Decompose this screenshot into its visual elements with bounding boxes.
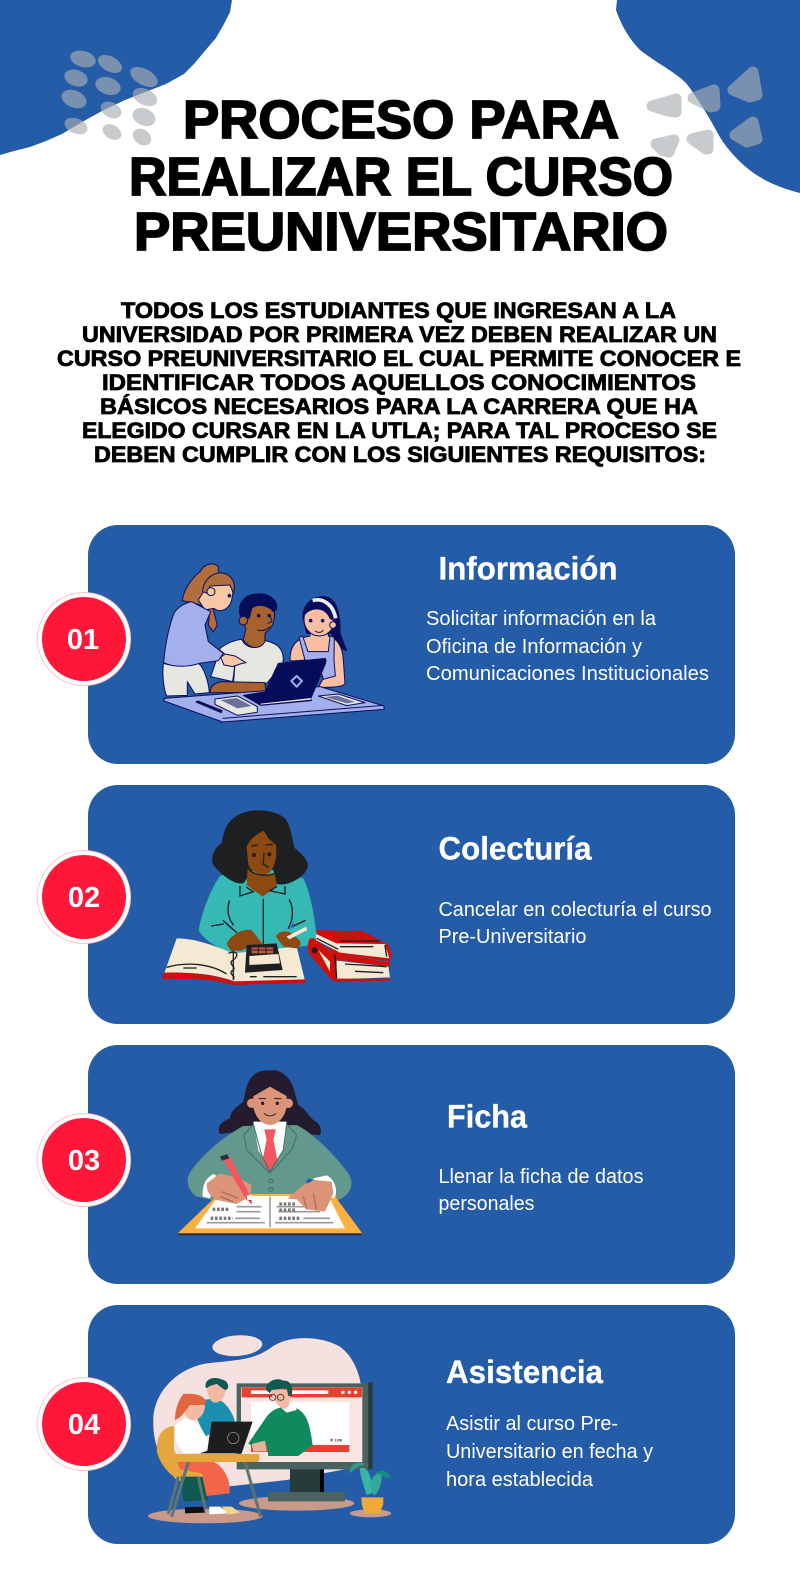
open book (164, 938, 235, 982)
pencil (223, 1156, 252, 1201)
number badge 03: 03 (68, 1145, 100, 1177)
body text (446, 1413, 653, 1491)
far girl (303, 597, 347, 663)
shirt (199, 868, 317, 953)
laptop and desk (200, 1422, 253, 1453)
monitor (290, 1467, 324, 1493)
intro text block: TODOS LOS ESTUDIANTES QUE INGRESAN A LA (121, 298, 676, 323)
title (129, 90, 673, 262)
intro text block: CURSO PREUNIVERSITARIO EL CUAL PERMITE CONOCER E (57, 346, 741, 371)
illustration: woman with calculator and binders (162, 810, 392, 985)
body text (438, 1166, 644, 1215)
body text: Pre-Universitario (438, 926, 586, 948)
title: PREUNIVERSITARIO (134, 202, 668, 262)
plant (361, 1497, 383, 1513)
title: PROCESO PARA (183, 90, 619, 150)
decorative marks: top left dots (59, 48, 161, 149)
cuffs and hands (203, 1174, 217, 1198)
body text: Asistir al curso Pre- (446, 1413, 618, 1435)
illustration: students in a live video class: LIVE (335, 1438, 343, 1442)
woman pointing (163, 663, 209, 696)
body text: hora establecida (446, 1469, 594, 1491)
teacher (248, 1407, 313, 1456)
body text: Solicitar información en la (426, 608, 657, 630)
body text: Universitario en fecha y (446, 1441, 653, 1463)
intro text block: ELEGIDO CURSAR EN LA UTLA; PARA TAL PROCESO SE (82, 418, 717, 443)
boy (193, 1399, 235, 1437)
hands and calculator (227, 930, 263, 951)
number badge 02 (38, 850, 130, 944)
hair (219, 1070, 321, 1135)
intro text block: DEBEN CUMPLIR CON LOS SIGUIENTES REQUISITOS: (94, 442, 706, 467)
heading: Información (438, 550, 618, 586)
suit (188, 1125, 351, 1202)
panel: step 2 colecturía (38, 785, 735, 1024)
intro text block: IDENTIFICAR TODOS AQUELLOS CONOCIMIENTOS (102, 370, 696, 395)
number badge 02: 02 (68, 882, 100, 914)
body text (438, 899, 712, 948)
title: REALIZAR EL CURSO (129, 147, 673, 207)
neck and face (247, 867, 277, 897)
man (218, 639, 283, 685)
body text: personales (438, 1193, 534, 1215)
clipboard and paper (178, 1194, 362, 1233)
body text (426, 608, 709, 685)
heading: Colecturía (438, 830, 592, 866)
intro text block: BÁSICOS NECESARIOS PARA LA CARRERA QUE HA (100, 394, 698, 419)
decorative blob: top left (0, 0, 232, 155)
decorative blob: top right (616, 0, 800, 193)
panel: step 4 asistencia (38, 1305, 735, 1544)
floor shadows (148, 1509, 263, 1523)
body text: Oficina de Información y (426, 636, 642, 658)
illustration: three students at a laptop (163, 564, 384, 722)
illustration: woman filling out a form (178, 1070, 362, 1235)
number badge 04: 04 (68, 1409, 100, 1441)
number badge 01: 01 (67, 624, 99, 656)
panel: step 3 ficha (38, 1045, 735, 1284)
shirt and tie (253, 1122, 287, 1172)
intro text block (57, 298, 741, 467)
number badge 03 (38, 1114, 130, 1206)
body text: Comunicaciones Institucionales (426, 663, 709, 685)
body text: Llenar la ficha de datos (438, 1166, 644, 1188)
decorative marks: top right drops (652, 72, 757, 152)
table (164, 687, 384, 722)
girl with chair (157, 1426, 204, 1484)
number badge 01 (38, 592, 130, 686)
heading: Asistencia (446, 1354, 603, 1390)
head (247, 1099, 256, 1108)
panel: step 1 información (38, 525, 735, 764)
illustration: students in a live video class (148, 1334, 391, 1523)
binders (315, 930, 392, 962)
number badge 04 (38, 1378, 130, 1470)
laptop (243, 658, 326, 705)
body text: Cancelar en colecturía el curso (438, 899, 712, 921)
hair (212, 810, 308, 884)
background blob (212, 1334, 263, 1358)
intro text block: UNIVERSIDAD POR PRIMERA VEZ DEBEN REALIZAR UN (82, 322, 717, 347)
papers (215, 696, 257, 715)
heading: Ficha (447, 1098, 527, 1134)
